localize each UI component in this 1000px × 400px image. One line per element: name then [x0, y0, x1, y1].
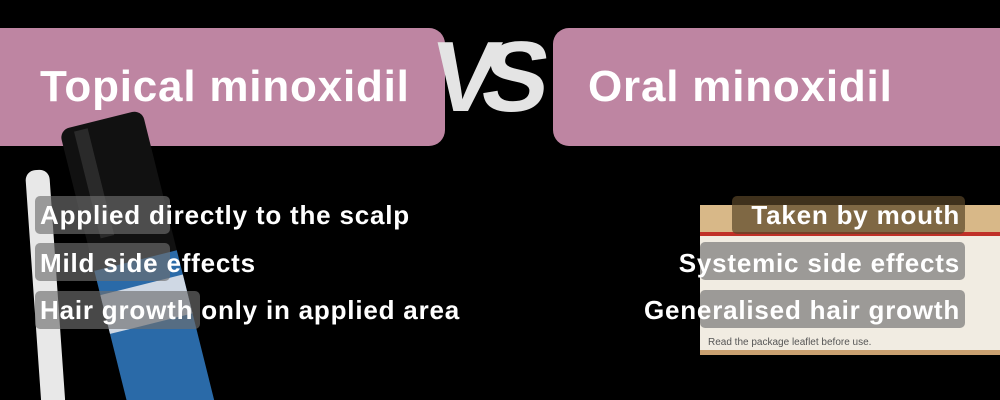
panel: left banner: Topical minoxidil: [40, 62, 410, 111]
icon: VS logo: VS: [424, 22, 541, 132]
icon: oral tablet box: [700, 205, 1000, 355]
text: left bullets: Hair growth only in applied area: [40, 295, 460, 325]
panel: right banner: Oral minoxidil: [588, 62, 893, 111]
icon: oral tablet box: Read the package leaflet before use.: [708, 337, 871, 348]
text: right bullets: Systemic side effects: [679, 248, 960, 278]
text: left bullets: Mild side effects: [40, 248, 256, 278]
text: right bullets: [644, 196, 965, 328]
text: left bullets: Applied directly to the scalp: [40, 200, 410, 230]
text: right bullets: Generalised hair growth: [644, 295, 960, 325]
panel: left banner: [0, 28, 445, 146]
text: right bullets: Taken by mouth: [751, 200, 960, 230]
text: left bullets: [35, 196, 460, 329]
icon: topical bottle: [26, 112, 214, 400]
panel: right banner: [553, 28, 1000, 146]
